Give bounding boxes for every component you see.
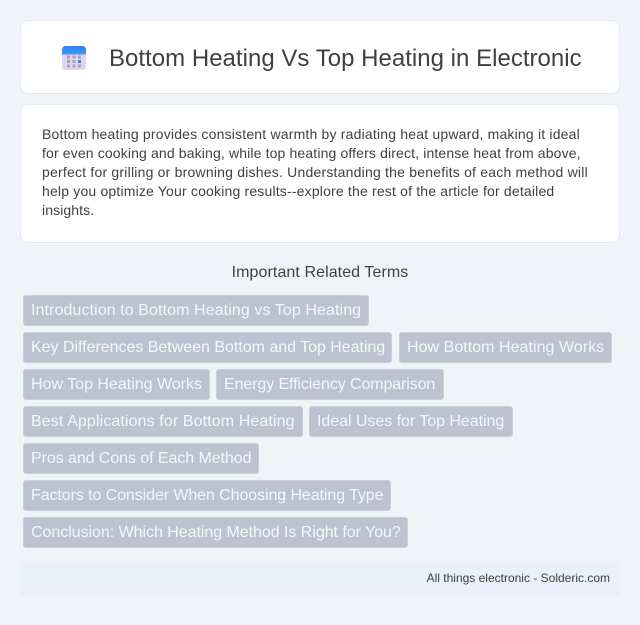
tag: Energy Efficiency Comparison [224,376,435,393]
tag list [23,295,612,548]
footer: All things electronic - Solderic.com [427,571,610,585]
text block: summary: insights. [42,202,94,218]
text block: summary: help you optimize Your cooking results--explore the rest of the article for detailed [42,183,554,199]
text block: summary [42,126,588,218]
tag [309,406,513,437]
tag: How Top Heating Works [31,376,202,393]
tag [216,369,444,400]
tag [23,295,369,326]
tag [399,332,612,363]
footer [20,561,620,595]
panel: summary card [20,104,620,243]
heading: related terms: Important Related Terms [232,264,408,281]
tag: Introduction to Bottom Heating vs Top Heating [31,302,361,319]
tag: Key Differences Between Bottom and Top Heating [31,339,385,356]
tag: Best Applications for Bottom Heating [31,413,295,430]
title: Bottom Heating Vs Top Heating in Electronic [109,45,582,72]
tag: Factors to Consider When Choosing Heating Type [31,487,383,504]
tag [23,369,210,400]
tag [23,517,408,548]
panel: title card [20,20,620,94]
tag: Ideal Uses for Top Heating [317,413,504,430]
tag: Pros and Cons of Each Method [31,450,251,467]
tag [23,480,391,511]
tag: How Bottom Heating Works [407,339,604,356]
tag [23,332,392,363]
text block: summary: Bottom heating provides consistent warmth by radiating heat upward, making it ideal [42,126,580,142]
tag [23,443,259,474]
icon: calendar [62,46,86,70]
text block: summary: perfect for grilling or browning dishes. Understanding the benefits of each method will [42,164,588,180]
tag: Conclusion: Which Heating Method Is Right for You? [31,524,401,541]
tag [23,406,303,437]
text block: summary: for even cooking and baking, while top heating offers direct, intense heat from above, [42,145,581,161]
